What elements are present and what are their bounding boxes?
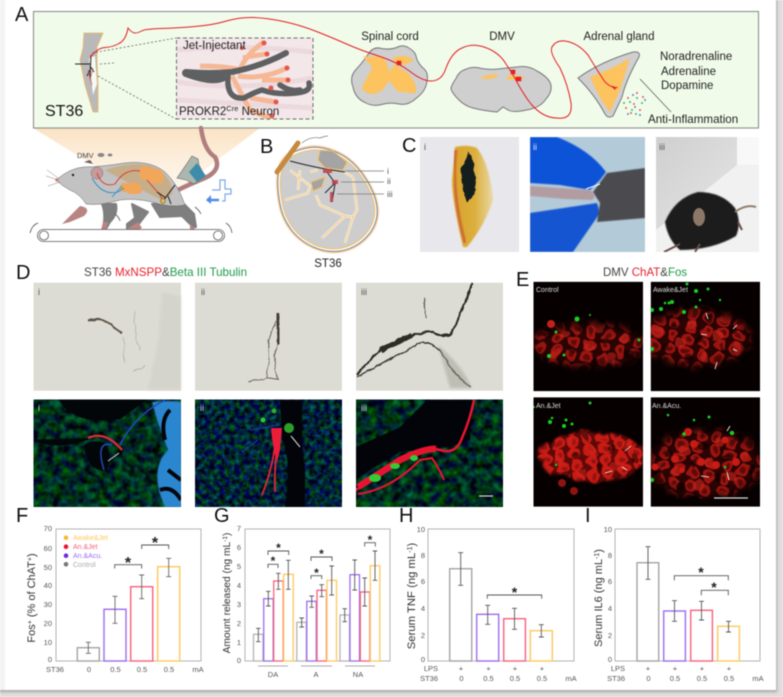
H x labels: + (486, 664, 491, 673)
G y ticks: 5 (237, 562, 241, 571)
G significance brackets: * (276, 541, 281, 555)
panel C iii: mouse photo: iii (659, 142, 665, 152)
I x labels: ST36 (607, 674, 625, 683)
label: anti-inflammation: Anti-Inflammation (648, 113, 738, 126)
panel D top iii: brightfield: iii (361, 287, 367, 297)
panel E anesthesia and acupuncture image (650, 397, 760, 507)
H significance bracket: * (512, 584, 518, 600)
panel H: bar chart TNF (406, 525, 577, 683)
F y ticks: 70 (44, 524, 52, 533)
G y ticks: 3 (237, 600, 241, 609)
treadmill (30, 207, 232, 242)
catecholamine labels (660, 51, 732, 92)
H x labels: + (513, 664, 518, 673)
H y ticks (417, 525, 425, 664)
panel E awake and jet image: Awake&Jet (653, 287, 688, 294)
I x labels (607, 664, 764, 683)
panel letters: B (260, 136, 273, 158)
nerve bundle (290, 161, 345, 202)
H error bars (458, 553, 544, 637)
F legend: Control (73, 562, 96, 569)
F y ticks: 40 (44, 581, 52, 590)
H y ticks: 6 (421, 577, 425, 586)
H y axis title: -1 (407, 546, 414, 553)
pulse waveform icon and arrow (206, 180, 231, 204)
label: ST36: ST36 (314, 258, 342, 270)
I significance brackets (674, 564, 728, 595)
panel C ii: injection photo: ii (533, 142, 537, 152)
panel A: pathway box (34, 12, 758, 128)
I y ticks: 0 (608, 655, 612, 664)
F x labels: 0.5 (110, 665, 121, 674)
panel A lower: rat on treadmill (30, 128, 232, 242)
panel letters: H (399, 505, 413, 527)
arrow to anti-inflammation (640, 79, 671, 112)
organs (120, 166, 163, 194)
H y ticks: 10 (417, 525, 425, 534)
red nerve path (90, 17, 617, 118)
inset label: PROKR2 Cre Neuron: Cre (226, 104, 238, 113)
F y axis title: ) (26, 553, 38, 557)
F x labels (46, 665, 204, 674)
brain to organ nerves (97, 171, 163, 201)
DMV section (451, 66, 551, 112)
F legend: Awake&Jet (73, 535, 108, 542)
panel G: bar chart released amounts (222, 524, 390, 679)
panel E control image (534, 282, 643, 391)
H significance bracket (487, 584, 542, 600)
I error bars (646, 547, 731, 632)
inset label: PROKR2 Cre Neuron: PROKR2 (179, 106, 226, 118)
rat body (56, 162, 185, 206)
H y axis title: ) (406, 543, 418, 547)
G y ticks: 2 (237, 619, 241, 628)
I x labels: + (700, 664, 705, 673)
panel D top ii: brightfield: ii (201, 287, 205, 297)
panel letters: F (16, 505, 28, 527)
F y axis title: Fos (26, 624, 38, 643)
rat back overlay (105, 164, 172, 201)
ST36 leg section (75, 33, 103, 112)
panel D bottom iii: fluorescence: iii (361, 403, 367, 413)
F x labels: 0.5 (164, 665, 174, 674)
F x labels: ST36 (46, 665, 64, 674)
H x labels: 0 (459, 674, 464, 683)
F error bars (86, 558, 171, 653)
panel E anesthesia and acupuncture image: An.&Acu. (652, 403, 681, 410)
panel D bottom ii: fluorescence: ii (200, 403, 204, 413)
I y ticks: 6 (608, 577, 612, 586)
G significance brackets: * (271, 554, 276, 568)
I significance brackets: * (711, 579, 717, 595)
I y axis title: -1 (594, 553, 601, 559)
G y ticks (237, 524, 241, 665)
rat paws (62, 206, 198, 232)
panel letters: E (516, 269, 529, 291)
catecholamine labels: Adrenaline (661, 66, 716, 78)
F y axis title: + (27, 557, 34, 561)
F significance brackets: * (152, 535, 159, 552)
rat ear and eye (91, 167, 103, 179)
H x labels: 0.5 (510, 674, 520, 683)
panel letters: I (585, 505, 591, 527)
adrenal gland section (578, 52, 646, 117)
F legend (64, 535, 108, 569)
panel D heading: ST36 MxNSPP&Beta III Tubulin (84, 266, 247, 279)
F x labels: 0.5 (137, 665, 147, 674)
panel C i: cleared tissue photo: i (424, 142, 426, 152)
F bars (77, 567, 180, 661)
G significance brackets (268, 533, 375, 580)
I y ticks (604, 525, 612, 664)
panel D top i: brightfield (34, 283, 181, 391)
F x labels: mA (192, 665, 204, 674)
F y axis title: (% of ChAT (26, 561, 38, 620)
panel B: ST36 cross-section: iii (387, 189, 393, 199)
H y ticks: 4 (421, 604, 425, 613)
I y ticks: 2 (608, 631, 612, 640)
G y axis title: Amount released (ng mL (222, 542, 233, 653)
panel E awake and jet image (650, 282, 760, 391)
rat legs (102, 204, 196, 229)
F significance brackets: * (125, 555, 132, 572)
H x labels: LPS (424, 664, 438, 673)
panel letters: G (214, 505, 230, 527)
H x labels: 0.5 (483, 674, 494, 683)
panel D bottom iii: fluorescence (356, 400, 503, 507)
panel D bottom ii: fluorescence (195, 400, 342, 507)
F y ticks: 30 (44, 600, 52, 609)
panel letters (15, 4, 591, 527)
I significance brackets: * (698, 564, 704, 580)
F y ticks: 0 (48, 655, 52, 664)
panel E control image: Control (536, 287, 559, 294)
panel D bottom i: fluorescence: i (38, 403, 40, 413)
label: DMV: DMV (489, 31, 515, 43)
cone from rat to panel A (33, 128, 260, 201)
panel D top i: brightfield: i (38, 287, 40, 297)
I x labels: mA (752, 674, 764, 683)
pointers i, ii, iii (337, 171, 384, 194)
panel I: bar chart IL6 (593, 525, 764, 683)
panel D bottom i: fluorescence (34, 400, 181, 507)
panel F: bar chart Fos (26, 524, 204, 674)
H y ticks: 0 (421, 655, 425, 664)
F x labels: 0 (87, 665, 91, 674)
G x labels: NA (353, 670, 363, 679)
G y axis title: ) (222, 533, 233, 536)
I x labels: + (673, 664, 678, 673)
I x labels: 0 (646, 674, 651, 683)
inset label: PROKR2 Cre Neuron: Neuron (238, 106, 279, 118)
F significance brackets (115, 535, 169, 572)
G significance brackets: * (368, 533, 373, 547)
panel C iii: mouse photo (656, 137, 759, 252)
G bars (254, 566, 380, 661)
panel B: ST36 cross-section (276, 136, 393, 270)
I x labels: + (727, 664, 732, 673)
panel B: ST36 cross-section: ii (387, 176, 391, 186)
H x labels: + (540, 664, 545, 673)
I x labels: 0.5 (670, 674, 680, 683)
F y ticks (44, 524, 52, 664)
G significance brackets: * (319, 547, 324, 561)
G y ticks: 1 (237, 638, 241, 647)
G x labels: A (313, 670, 319, 679)
I x labels: + (646, 664, 651, 673)
panel letters: D (16, 262, 30, 284)
G y ticks: 4 (237, 581, 241, 590)
ST36 label: ST36 (45, 103, 83, 120)
H bars (450, 569, 552, 661)
I y ticks: 4 (608, 604, 612, 613)
I y ticks: 8 (608, 551, 612, 560)
brain stem mini sketch and DMV label (77, 151, 112, 164)
F y ticks: 20 (44, 619, 52, 628)
G y ticks: 7 (237, 524, 241, 533)
label: spinal cord: Spinal cord (361, 31, 419, 43)
H x labels: + (459, 664, 464, 673)
G y ticks: 0 (237, 656, 241, 665)
panel E anesthesia and jet image: An.&Jet (536, 403, 561, 410)
H y ticks: 8 (421, 551, 425, 560)
panel E heading: DMV ChAT&Fos (603, 267, 687, 279)
H x labels: mA (565, 674, 577, 683)
inset label: Jet-Injectant: Jet-Injectant (183, 40, 246, 52)
I y axis title: Serum IL6 (ng mL (593, 559, 605, 647)
I y axis title: ) (593, 549, 605, 553)
label: adrenal gland: Adrenal gland (584, 31, 654, 43)
G error bars (256, 551, 377, 642)
F y ticks: 50 (44, 563, 52, 572)
panel letters: C (402, 135, 416, 157)
muscle boundaries (318, 150, 347, 170)
inset: jet-injectant neuron (176, 38, 313, 119)
F legend: An.&Acu. (73, 553, 102, 560)
panel D top ii: brightfield (195, 283, 342, 391)
brain stem mini sketch and DMV label: DMV (77, 151, 94, 160)
F legend: An.&Jet (73, 544, 98, 551)
panel C ii: injection photo (530, 137, 645, 252)
catecholamine labels: Noradrenaline (660, 51, 732, 63)
panel E anesthesia and jet image (533, 397, 643, 507)
G y axis title: -1 (222, 536, 229, 542)
H y axis title: Serum TNF (ng mL (406, 553, 418, 649)
H x labels: 0.5 (537, 674, 547, 683)
F y ticks: 60 (44, 544, 52, 553)
H y ticks: 2 (421, 631, 425, 640)
I bars (637, 563, 739, 661)
panel letters: A (15, 4, 29, 26)
panel D top iii: brightfield (356, 283, 503, 391)
spinal cord section (352, 46, 427, 105)
panel C i: cleared tissue photo (420, 137, 519, 252)
panel B: ST36 cross-section: i (387, 166, 389, 176)
I x labels: 0.5 (724, 674, 734, 683)
I x labels: 0.5 (697, 674, 707, 683)
jet injector (157, 185, 175, 204)
skin patch (277, 143, 298, 172)
dotted zoom lines (92, 38, 176, 119)
G x labels: DA (268, 670, 278, 679)
G x labels (258, 666, 375, 679)
rat tail (178, 128, 217, 190)
G y ticks: 6 (237, 543, 241, 552)
catecholamine labels: Dopamine (661, 80, 713, 92)
I y ticks: 10 (604, 525, 612, 534)
F y axis title: + (27, 620, 34, 624)
H x labels: ST36 (420, 674, 438, 683)
I x labels: LPS (611, 664, 625, 673)
F y ticks: 10 (44, 638, 52, 647)
H x labels (420, 664, 577, 683)
G significance brackets: * (314, 566, 319, 580)
